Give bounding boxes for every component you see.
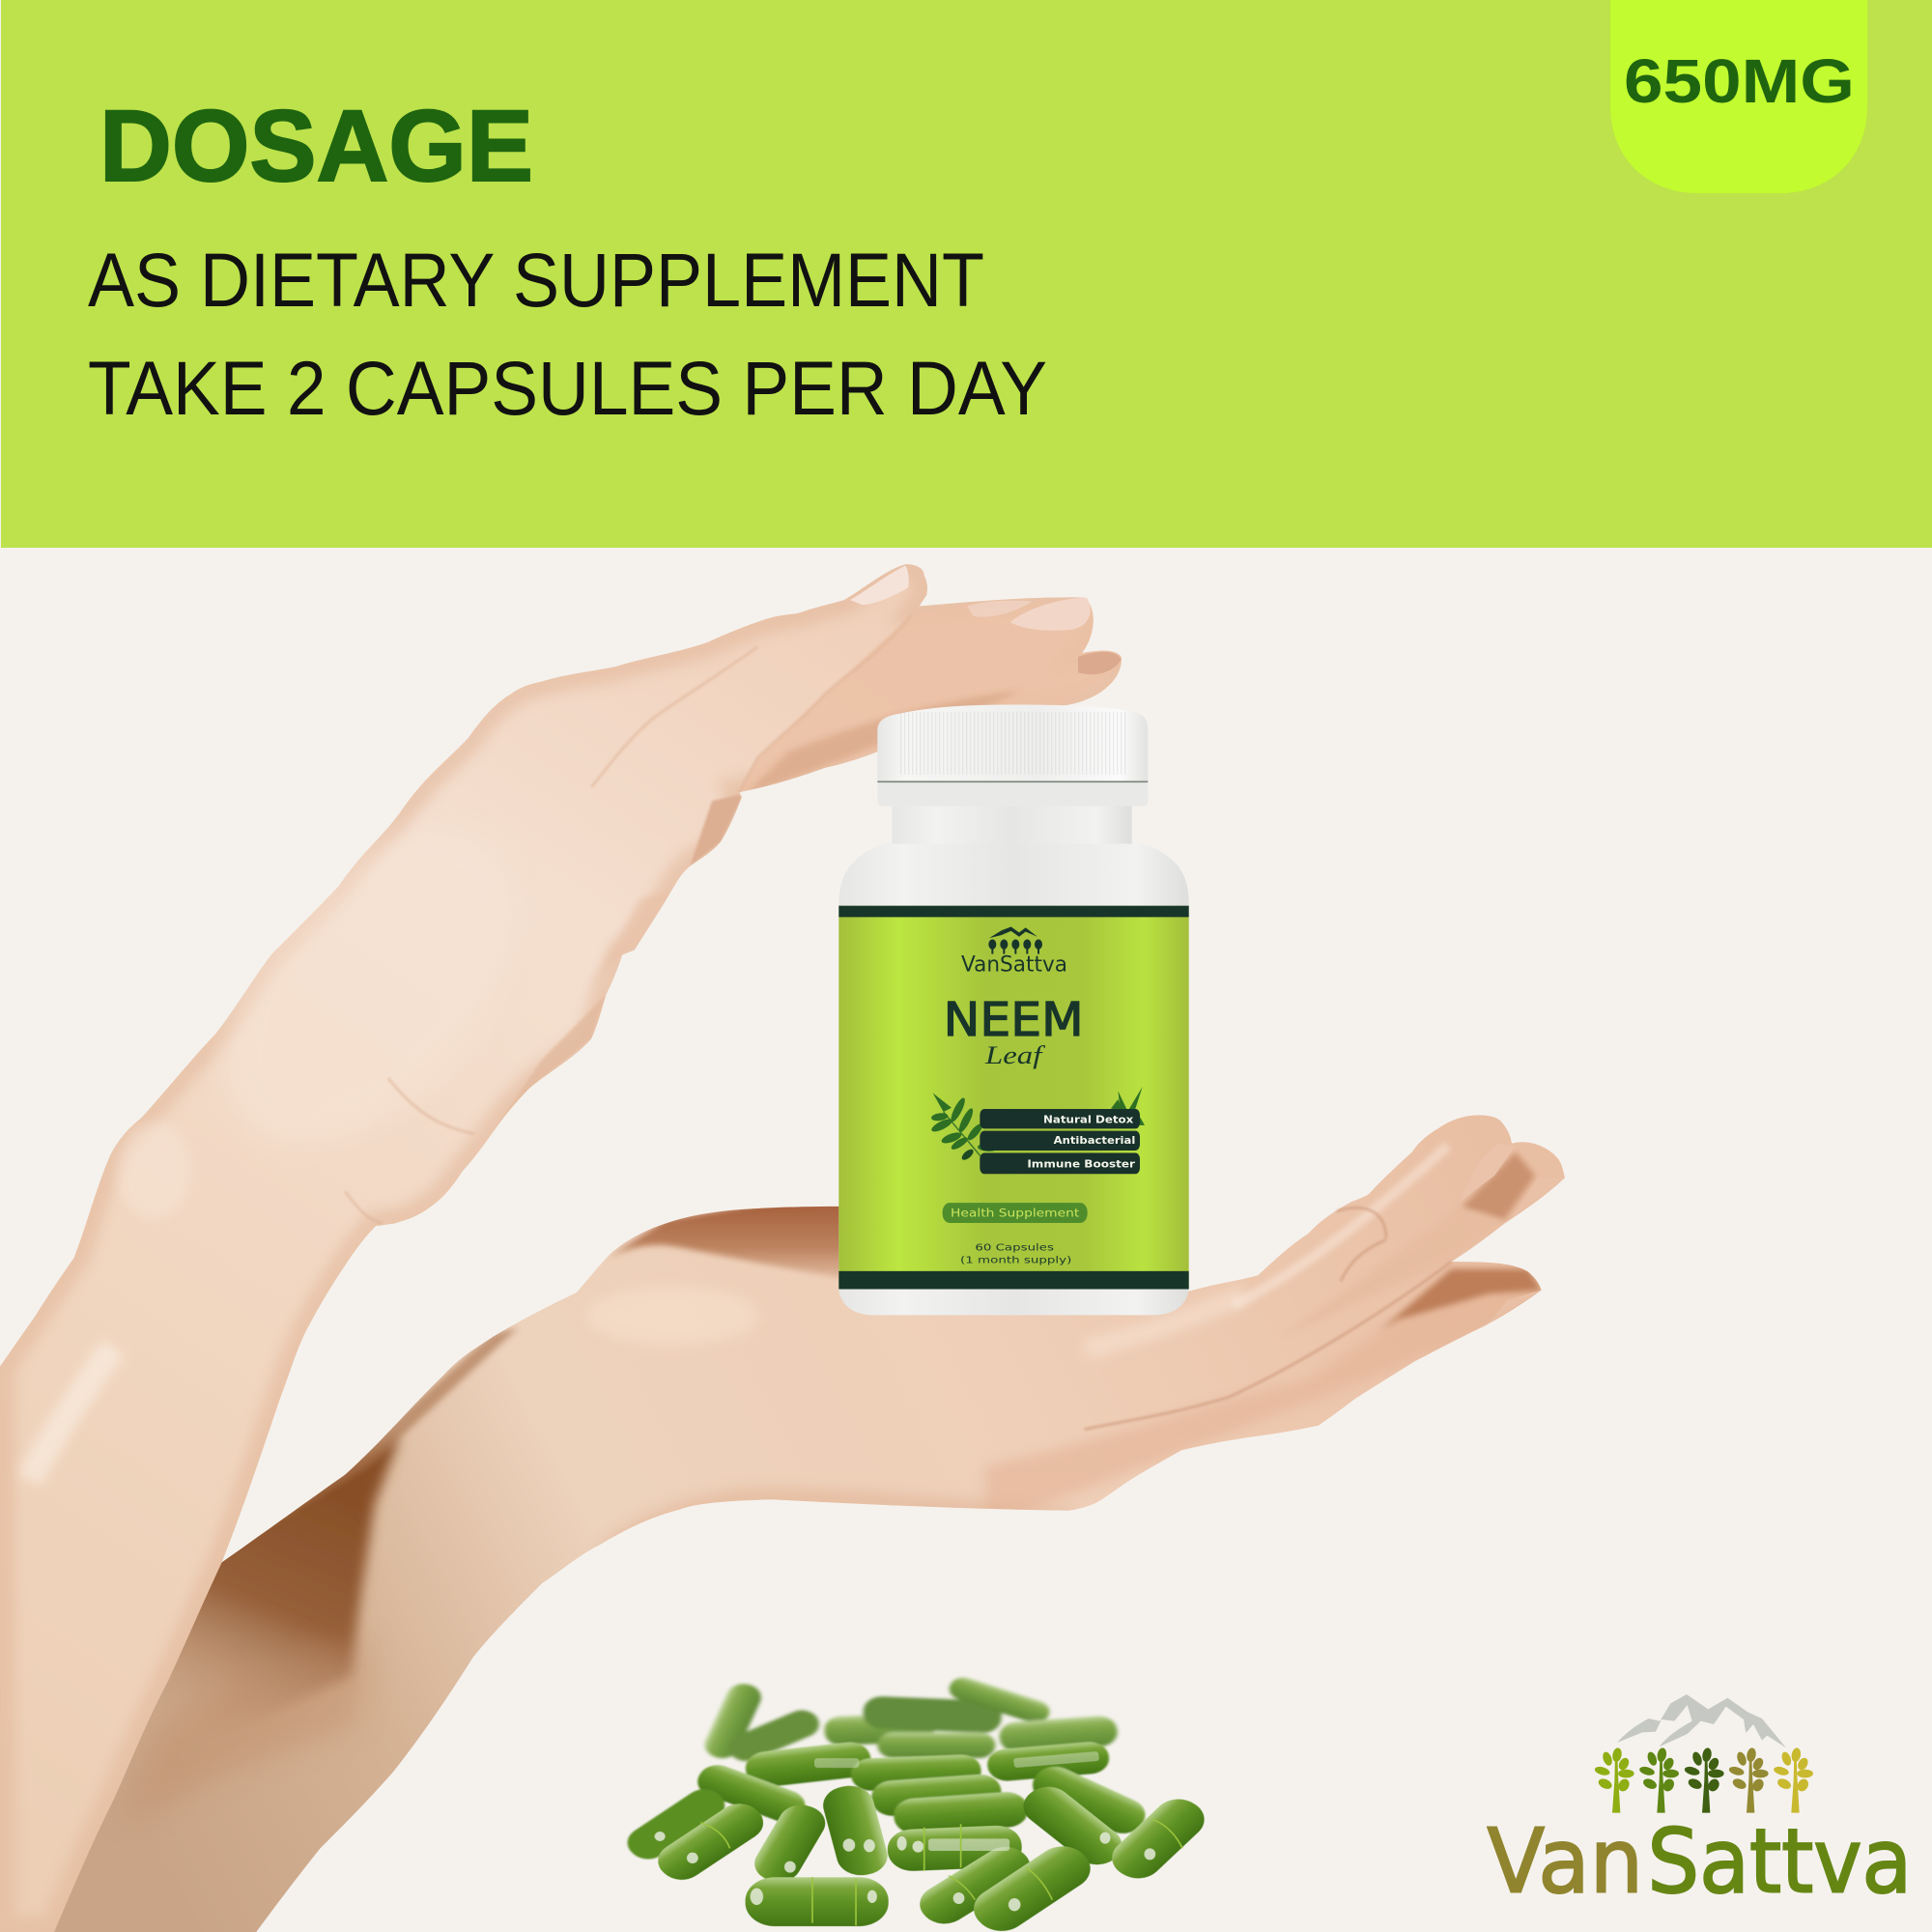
benefit pill: Antibacterial [980, 1131, 1140, 1151]
label [838, 906, 1189, 1290]
badge: 650MG [1610, 0, 1867, 193]
VanSattva logo [1487, 1694, 1912, 1913]
logo wordmark: Van [1487, 1809, 1643, 1913]
cap [877, 704, 1148, 781]
benefit pill: Natural Detox [980, 1109, 1140, 1128]
badge: 650MG: 650MG [1624, 46, 1855, 116]
fingernails [850, 565, 909, 605]
benefit pill: Natural Detox: Natural Detox [1043, 1114, 1134, 1126]
capsule highlights [655, 1751, 1155, 1911]
capsule seams [700, 1819, 1182, 1925]
label title: NEEM: NEEM [944, 995, 1084, 1047]
lower hand [25, 1115, 1565, 1932]
top banner panel [1, 0, 1932, 548]
finger nails and creases [1459, 1144, 1516, 1203]
capsule count: 60 Capsules [975, 1243, 1055, 1254]
benefit pill: Antibacterial: Antibacterial [1054, 1135, 1135, 1147]
upper hand [0, 564, 1122, 1932]
bottle body [838, 841, 1189, 1315]
benefit pill: Immune Booster: Immune Booster [1027, 1158, 1135, 1171]
heading: DOSAGE: DOSAGE [99, 90, 533, 203]
label logo [961, 926, 1067, 977]
benefit pill: Immune Booster [980, 1153, 1140, 1174]
text: take 2 capsules per day: TAKE 2 CAPSULES PER DAY [88, 345, 1047, 431]
logo wordmark [1487, 1809, 1912, 1913]
product bottle [838, 704, 1189, 1315]
label subtitle: Leaf: Leaf [984, 1042, 1046, 1070]
logo trees [1594, 1747, 1813, 1813]
pile of green capsules [619, 1674, 1214, 1932]
neem leaves left [930, 1094, 998, 1162]
capsule count: (1 month supply) [960, 1256, 1071, 1266]
logo mountains [1617, 1694, 1786, 1747]
neck ring [877, 781, 1148, 806]
hands holding the bottle [0, 564, 1565, 1932]
Health Supplement pill: Health Supplement [951, 1207, 1079, 1220]
logo wordmark: Sattva [1647, 1809, 1912, 1913]
neem leaves right [1111, 1087, 1145, 1125]
Health Supplement pill [943, 1203, 1088, 1223]
text: as dietary supplement: AS DIETARY SUPPLEMENT [88, 237, 984, 323]
capsule count [960, 1243, 1071, 1266]
label logo: VanSattva [961, 951, 1067, 977]
bottle neck [892, 804, 1132, 843]
